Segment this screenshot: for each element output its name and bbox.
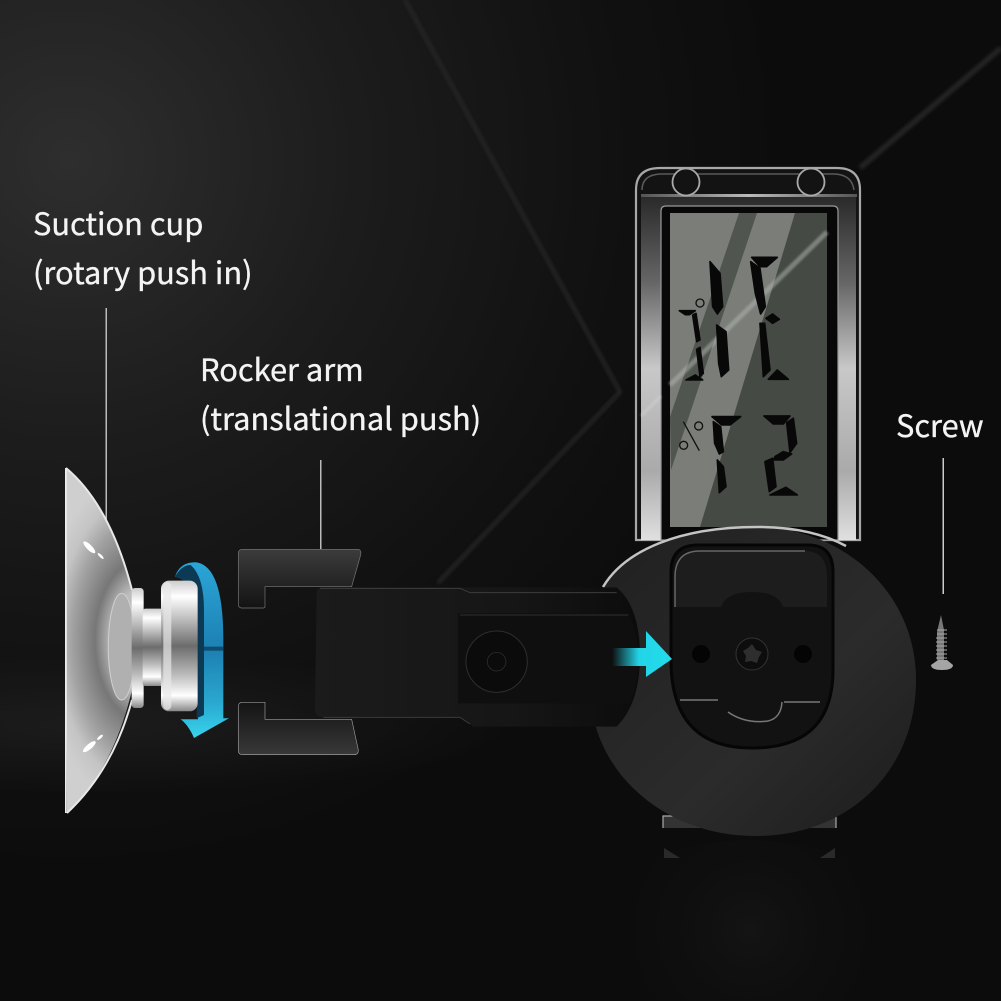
label: rocker arm: Rocker arm	[200, 345, 364, 390]
mount holes	[672, 168, 824, 196]
label: suction cup: (rotary push in)	[33, 248, 253, 293]
arrow: translational push	[612, 631, 672, 677]
thermometer body	[636, 168, 860, 540]
display bezel	[661, 206, 838, 540]
label: rocker arm: (translational push)	[200, 394, 481, 439]
leader line: suction cup	[106, 308, 107, 524]
label: suction cup	[33, 199, 253, 293]
label: suction cup: Suction cup	[33, 199, 203, 244]
keyhole mount	[671, 545, 833, 748]
suction cup	[65, 468, 198, 813]
leader line: screw	[942, 458, 944, 594]
icon: screw	[931, 615, 953, 670]
rocker arm	[315, 587, 640, 727]
digits: temperature and humidity	[679, 257, 797, 495]
label: rocker arm	[200, 345, 481, 439]
screw slot	[736, 638, 768, 670]
rotation arrow	[175, 562, 229, 738]
leader line: rocker arm	[320, 460, 322, 549]
rocker arm clip	[238, 549, 361, 755]
mounting disc	[592, 527, 916, 858]
LCD screen	[670, 213, 827, 527]
metal frame	[636, 168, 860, 540]
label: screw: Screw	[896, 401, 984, 446]
